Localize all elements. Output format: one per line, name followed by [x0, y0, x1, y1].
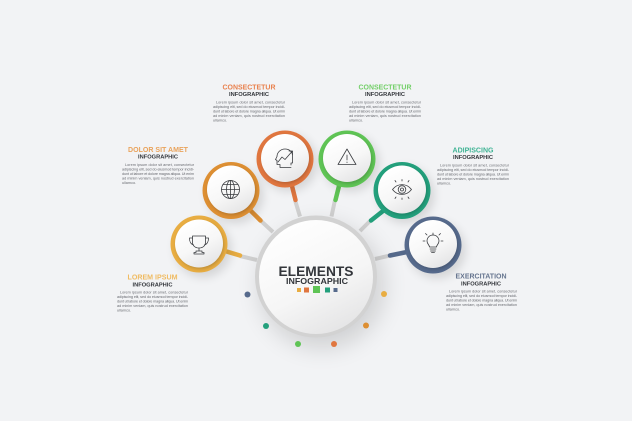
icon: trophy: [190, 236, 208, 254]
text: dolor sit amet: adipiscing elit, sed do eiusmod tempor incidi-: [122, 168, 195, 172]
text: consectetur red: Lorem ipsum dolor sit amet, consectetur: [216, 100, 286, 104]
text: exercitation: ad minim veniam, quis nostrud exercitation: [446, 303, 517, 307]
text: consectetur green: ullamco.: [349, 118, 363, 122]
text: lorem ipsum: [117, 272, 189, 312]
text: consectetur red: ad minim veniam, quis nostrud exercitation: [213, 114, 285, 118]
text: dolor sit amet: INFOGRAPHIC: [138, 154, 178, 160]
text: consectetur green: dunt ut labore et dolore magna aliqua. Ut enim: [349, 110, 421, 114]
text: exercitation: dunt ut labore et dolore magna aliqua. Ut enim: [446, 298, 517, 302]
text: consectetur red: CONSECTETUR: [222, 82, 276, 92]
text: dolor sit amet: ullamco.: [122, 181, 136, 185]
text: lorem ipsum: INFOGRAPHIC: [132, 282, 173, 288]
node: exercitation: [404, 216, 465, 278]
hub subtitle: INFOGRAPHIC: [286, 276, 348, 286]
icon: eye: [392, 180, 412, 200]
text: exercitation: INFOGRAPHIC: [461, 282, 501, 288]
text: adipiscing: [437, 146, 510, 186]
text: lorem ipsum: ad minim veniam, quis nostrud exercitation: [117, 304, 188, 308]
text: lorem ipsum: Lorem ipsum dolor sit amet, consectetur: [120, 290, 189, 294]
text: dolor sit amet: ad minim veniam, quis nostrud exercitation: [122, 176, 194, 180]
icon: light bulb: [423, 233, 443, 252]
node: lorem ipsum: [170, 216, 231, 277]
text: dolor sit amet: DOLOR SIT AMET: [128, 145, 189, 154]
text: lorem ipsum: dunt ut labore et dolore magna aliqua. Ut enim: [117, 300, 188, 304]
text: consectetur green: adipiscing elit, sed do eiusmod tempor incidi-: [349, 105, 422, 109]
text: consectetur green: Lorem ipsum dolor sit amet, consectetur: [352, 100, 422, 104]
text: adipiscing: dunt ut labore et dolore magna aliqua. Ut enim: [437, 172, 509, 176]
node: consectetur green: [318, 130, 379, 191]
text: exercitation: adipiscing elit, sed do eiusmod tempor incidi-: [446, 294, 518, 298]
text: lorem ipsum: LOREM IPSUM: [128, 272, 178, 282]
icon: warning triangle: [338, 149, 356, 164]
text: adipiscing: Lorem ipsum dolor sit amet, consectetur: [440, 164, 510, 168]
text: consectetur green: [349, 82, 422, 122]
text: adipiscing: ullamco.: [437, 182, 451, 186]
text: exercitation: [446, 272, 518, 312]
hub title: ELEMENTS: [278, 263, 354, 279]
connector sticks: [225, 186, 407, 260]
text: consectetur red: [213, 82, 286, 122]
text: adipiscing: ADIPISCING: [452, 146, 494, 154]
text: consectetur red: INFOGRAPHIC: [229, 92, 269, 98]
text: exercitation: Lorem ipsum dolor sit amet, consectetur: [449, 290, 518, 294]
icon: head with chart: [276, 149, 292, 168]
text: adipiscing: ad minim veniam, quis nostrud exercitation: [437, 177, 509, 181]
decorative dots: [244, 291, 387, 347]
text: exercitation: ullamco.: [446, 308, 460, 312]
text: consectetur red: dunt ut labore et dolore magna aliqua. Ut enim: [213, 110, 285, 114]
text: dolor sit amet: Lorem ipsum dolor sit amet, consectetur: [125, 163, 195, 167]
text: adipiscing: INFOGRAPHIC: [453, 155, 493, 161]
node: adipiscing: [374, 162, 434, 223]
text: consectetur red: ullamco.: [213, 118, 227, 122]
text: adipiscing: adipiscing elit, sed do eiusmod tempor incidi-: [437, 168, 510, 172]
text: consectetur red: adipiscing elit, sed do eiusmod tempor incidi-: [213, 105, 286, 109]
central hub: [255, 216, 384, 348]
text: lorem ipsum: ullamco.: [117, 308, 131, 312]
node: consectetur red: [256, 130, 317, 191]
text: exercitation: EXERCITATION: [456, 272, 506, 280]
text: consectetur green: ad minim veniam, quis nostrud exercitation: [349, 114, 421, 118]
text: dolor sit amet: [122, 145, 195, 185]
text: dolor sit amet: dunt ut labore et dolore magna aliqua. Ut enim: [122, 172, 194, 176]
node: dolor sit amet: [202, 162, 263, 223]
colour squares: [297, 286, 338, 293]
text: lorem ipsum: adipiscing elit, sed do eiusmod tempor incidi-: [117, 295, 189, 299]
text: consectetur green: CONSECTETUR: [358, 82, 412, 92]
icon: globe: [222, 180, 240, 198]
text: consectetur green: INFOGRAPHIC: [365, 92, 405, 98]
